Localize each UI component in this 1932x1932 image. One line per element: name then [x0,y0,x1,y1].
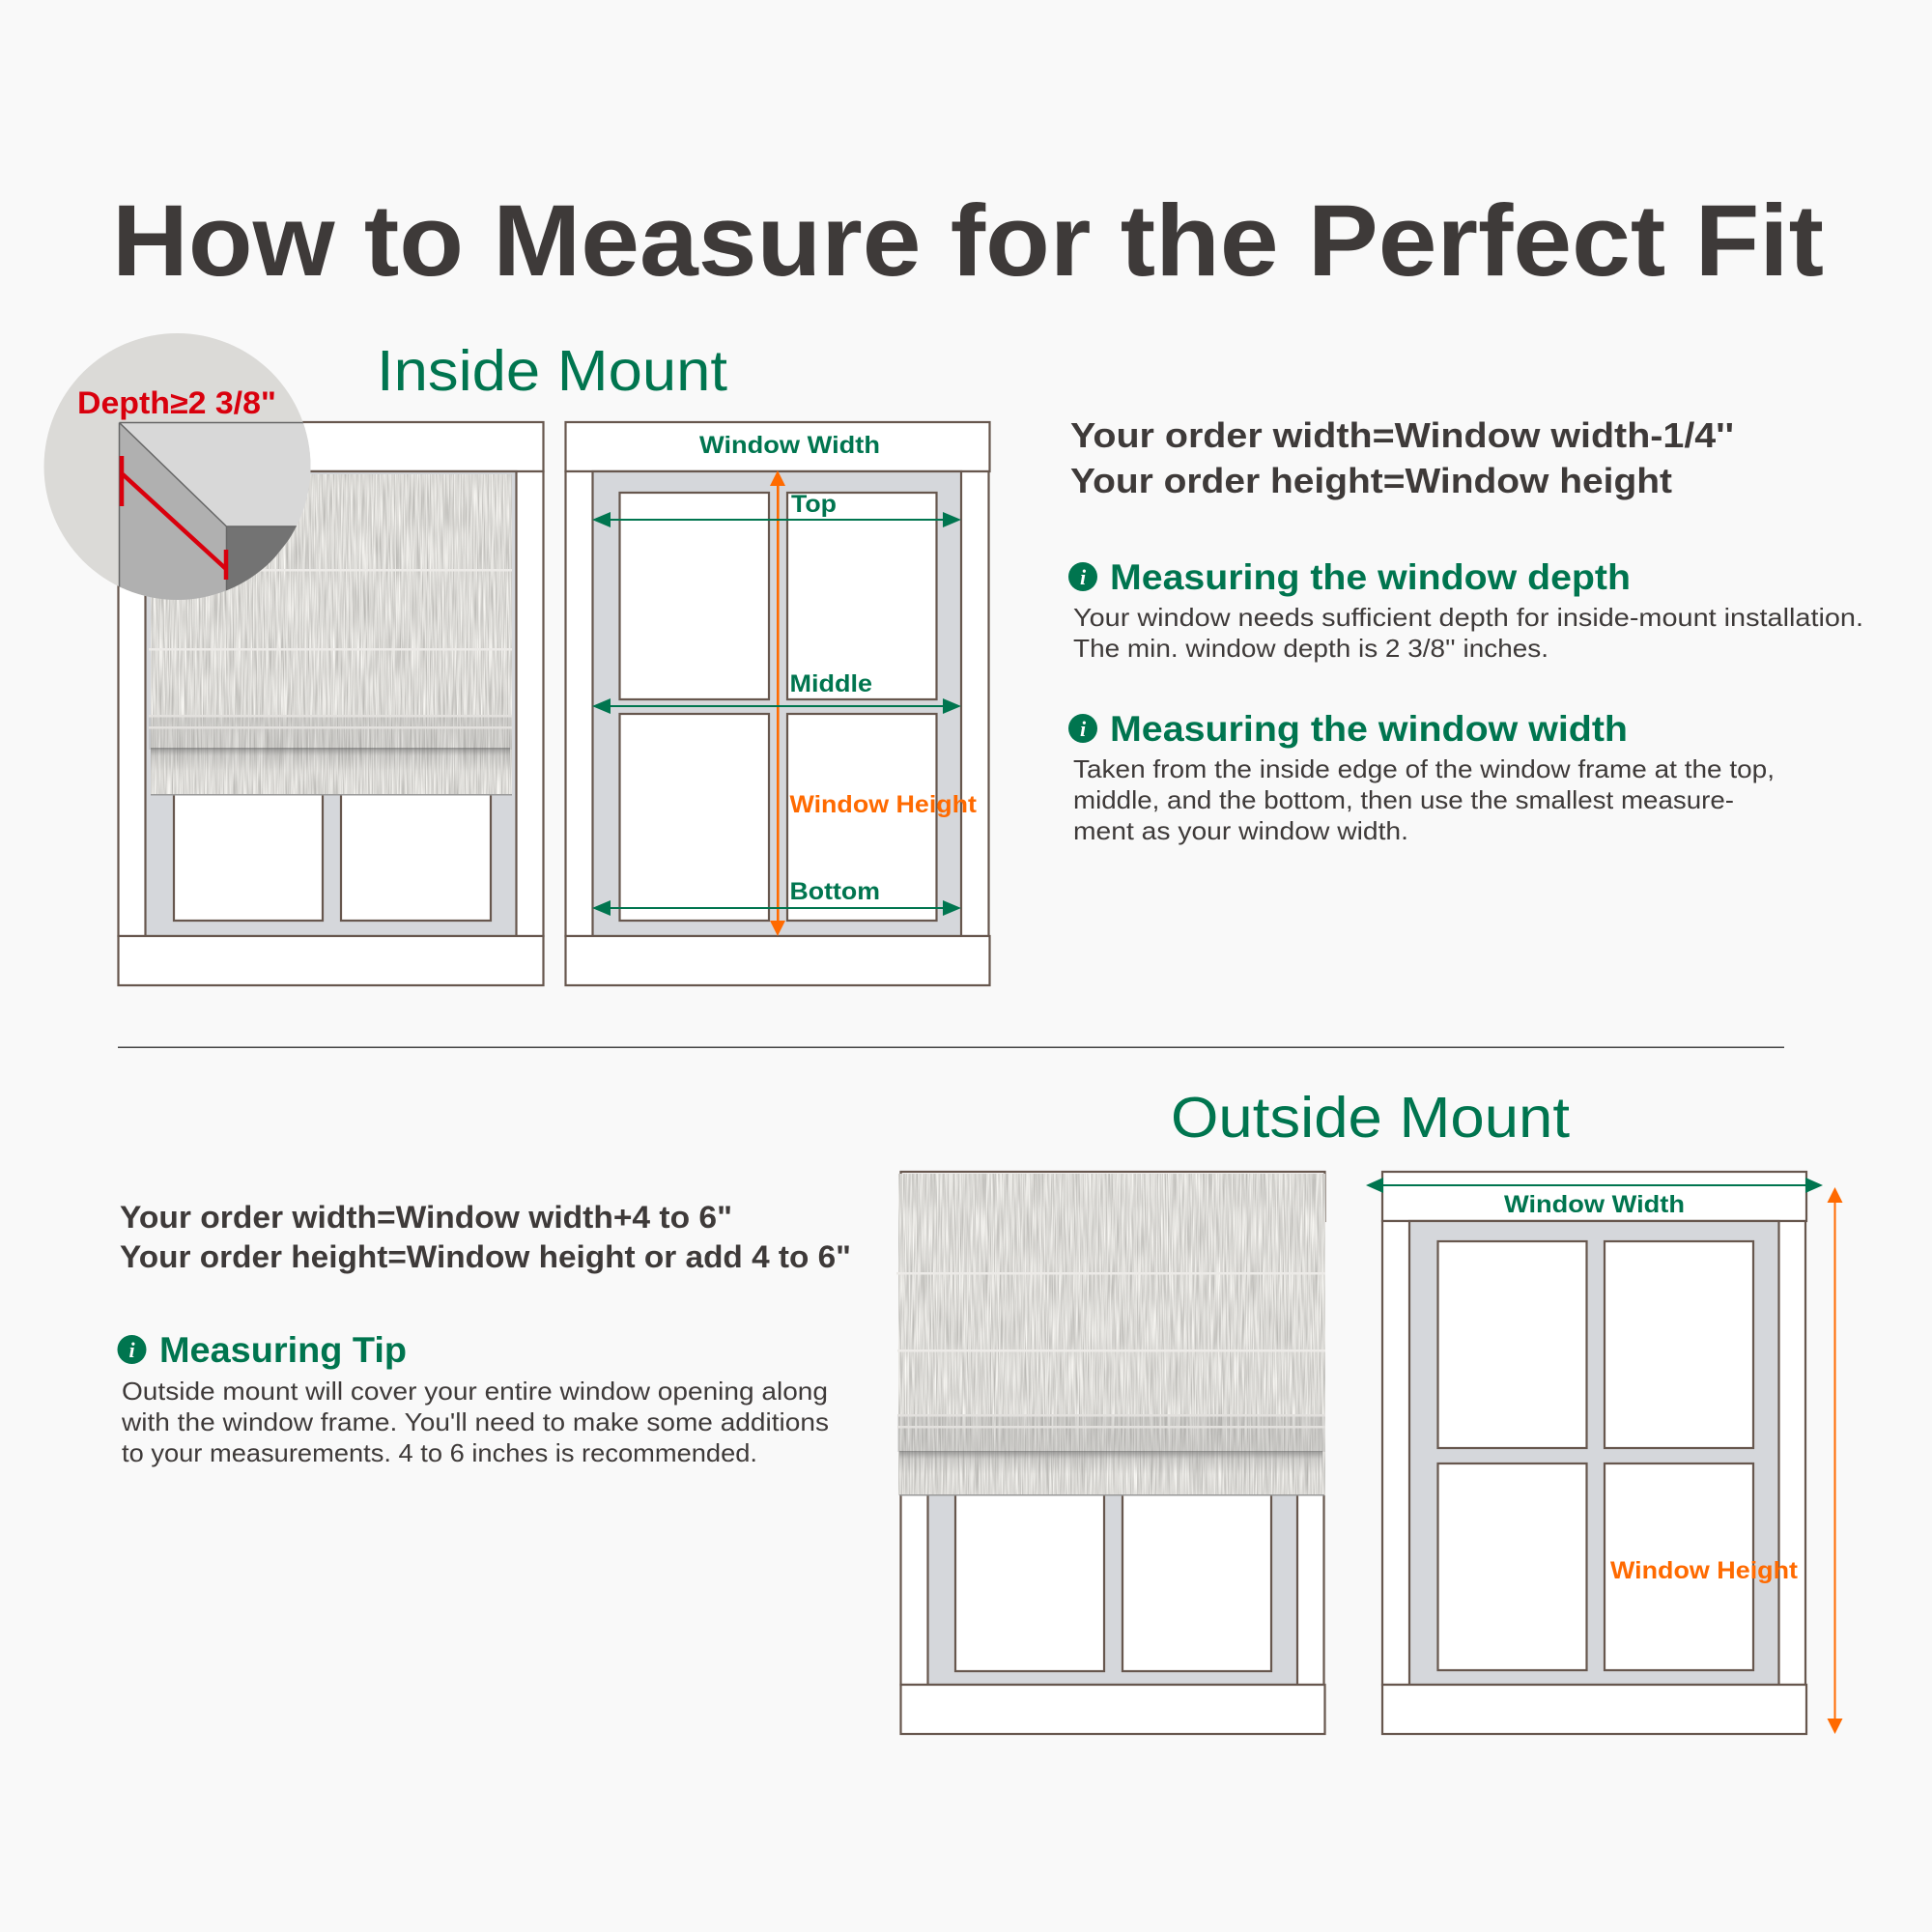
arrow: bottom width [592,900,961,916]
heading: outside mount: Outside Mount [1171,1086,1570,1150]
roman shade: outside mount [896,1174,1325,1495]
text: measuring tip: with the window frame. You'll need to make some additions [121,1407,829,1436]
label: depth requirement: Depth≥2 3/8" [77,385,276,420]
diagram: inside mount window with shade [118,422,543,985]
label: window width: Window Width [1504,1191,1685,1218]
text: window width: Taken from the inside edge of the window frame at the top, [1073,754,1775,783]
label: window width: Window Width [699,432,880,459]
section: measuring the window depth [1068,557,1863,663]
label: window height: Window Height [1610,1557,1799,1584]
icon: info: i [1080,565,1087,589]
arrow: outside width [1366,1178,1823,1193]
roman shade: inside mount [149,474,512,796]
icon: info: i [128,1338,135,1362]
icon: info [1068,714,1097,743]
text: window width: ment as your window width. [1073,816,1408,845]
formula: outside mount order size: Your order height=Window height or add 4 to 6" [120,1239,851,1274]
formula: inside mount order size [1070,415,1734,500]
label: bottom: Bottom [790,878,880,905]
heading: window depth: Measuring the window depth [1110,557,1631,597]
formula: outside mount order size: Your order width=Window width+4 to 6" [120,1200,732,1235]
diagram: outside mount measuring window [1366,1172,1843,1734]
heading: window width: Measuring the window width [1110,709,1628,749]
arrow: top width [592,512,961,527]
diagram: inside mount measuring window [566,422,989,985]
text: measuring tip [121,1377,829,1467]
heading: inside mount: Inside Mount [377,339,727,403]
text: window width: middle, and the bottom, then use the smallest measure- [1073,785,1734,814]
magnifier: window depth detail [44,333,319,618]
arrow: middle width [592,698,961,714]
icon: info [1068,562,1097,591]
formula: outside mount order size [120,1200,851,1274]
text: window width [1073,754,1775,845]
arrow: outside height [1828,1187,1843,1734]
formula: inside mount order size: Your order height=Window height [1070,461,1672,500]
section: measuring tip [118,1330,829,1467]
section: measuring the window width [1068,709,1775,845]
text: measuring tip: to your measurements. 4 to 6 inches is recommended. [122,1438,757,1467]
title: How to Measure for the Perfect Fit [112,185,1824,298]
text: window depth: Your window needs sufficient depth for inside-mount installation. [1073,603,1863,632]
formula: inside mount order size: Your order width=Window width-1/4'' [1070,415,1734,455]
text: measuring tip: Outside mount will cover your entire window opening along [122,1377,828,1406]
text: window depth [1073,603,1863,663]
arrow: window height [770,470,785,936]
label: window height: Window Height [790,791,978,818]
label: middle: Middle [790,670,872,697]
icon: info: i [1080,717,1087,741]
label: top: Top [791,491,837,518]
heading: measuring tip: Measuring Tip [159,1330,407,1370]
text: window depth: The min. window depth is 2 3/8'' inches. [1073,634,1548,663]
icon: info [118,1335,147,1364]
diagram: outside mount window with shade [896,1172,1325,1734]
